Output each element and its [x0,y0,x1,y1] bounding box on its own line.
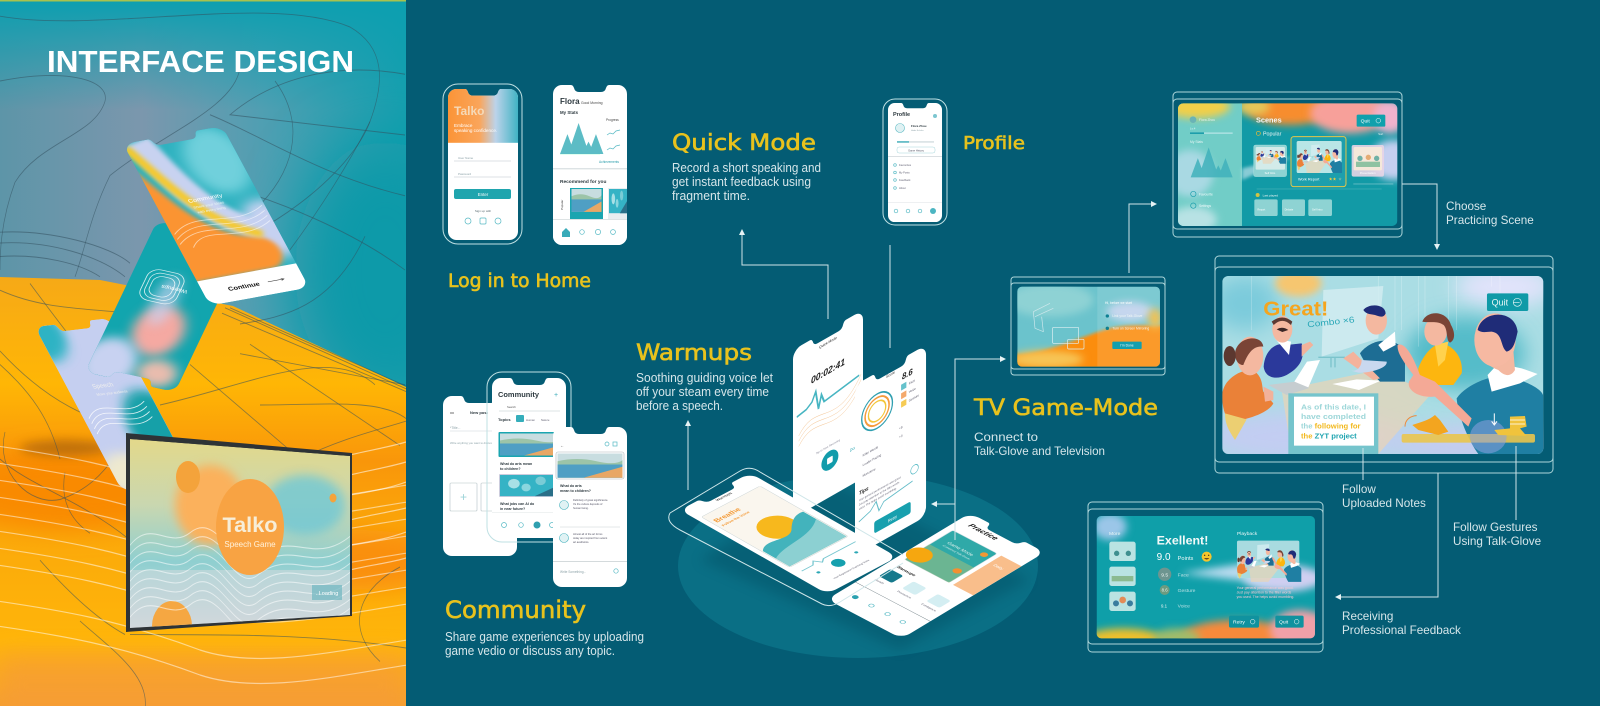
arrow: game to feedback [1339,473,1438,597]
discussion phone: It's the culture deposits of [573,502,603,506]
heading: community: Community [445,596,586,624]
login phone [443,84,522,244]
profile phone: Favourites [899,163,912,167]
quick mode phone: Tap to Start Recording [816,438,841,456]
TV game mode screen: Turn on Screen Mirroring [1112,326,1149,330]
arrow: to warmups [687,424,689,490]
score phone: Tips [859,486,869,497]
profile phone: Feedback [899,178,911,182]
scenes screen: Flora Zhou [1199,118,1215,122]
community phone: in near future? [500,507,525,511]
community phone: Search [507,405,516,409]
feedback screen: Face [1178,572,1189,578]
floor waves [0,442,420,683]
scenes screen: Self Intro [1312,208,1323,212]
warmups phone: Warmups [714,491,734,502]
text: warmups description [636,371,774,413]
score phone: Face [909,378,915,386]
scenes screen: Scenes [1256,116,1282,125]
TV: talko speech game: Speech Game [224,540,276,549]
home phone: Good Morning [581,101,603,105]
feedback screen [1083,502,1330,657]
login phone: speaking confidence. [454,128,497,133]
main game screen [1205,256,1558,473]
label: choose practicing scene: Practicing Scene [1446,214,1534,227]
TV game mode screen [1007,277,1165,375]
label: choose practicing scene [1446,200,1534,227]
community phone: Community [498,390,540,399]
TV game mode screen: Link your Talk-Glove [1112,314,1143,318]
feedback screen: Playback [1237,531,1258,537]
text: quick mode description: Record a short speaking and [672,161,821,175]
discussion phone: human being. [573,506,589,510]
score phone: 8.6 [902,366,913,382]
home phone: My Stats [560,110,579,115]
new post phone: New post [470,410,488,415]
score phone: used. The helps avoid mumbling. [859,486,897,511]
warmups phone: Your Expression Coaching Voice [832,559,871,580]
text: warmups description: before a speech. [636,399,723,413]
score phone: Gesture [909,393,919,403]
main game screen: Great! [1263,297,1328,320]
phone: community screen: Community [187,193,225,205]
feedback screen: Gesture [1178,588,1196,594]
community phone: to children? [500,467,521,471]
practice phone: Practice [966,522,1001,542]
practice phone: Combined Talk-Glove [941,544,972,561]
text: quick mode description: get instant feedback using [672,175,811,189]
login phone: Sign up with [475,209,492,213]
scenes screen [1163,92,1417,237]
phone: community screen: with every thing [197,206,226,214]
new post phone: + [460,490,467,504]
practice phone: Daily [992,563,1006,571]
score phone: Voice [909,386,916,394]
score phone: Retry [888,513,898,524]
label: receiving feedback: Receiving [1342,610,1393,623]
quick mode phone: 00:02:41 [811,357,845,387]
arrowhead: warmups [685,420,691,426]
home phone: Flora [560,97,580,106]
arrowhead: scenes [1151,201,1157,207]
scenes screen: ★ [1338,177,1342,182]
discussion phone [553,427,627,587]
practice phone: Game Mode [945,541,975,557]
scenes screen: ★★ [1329,177,1337,182]
discussion phone: art aesthetics. [573,540,589,544]
arrow: scenes to game [1402,184,1437,245]
scenes screen: Settings [1199,204,1211,208]
TV: talko speech game: Talko [222,514,278,537]
feedback screen: Your general performance was good. [1237,586,1294,590]
main game screen: Quit [1492,297,1509,307]
home phone [553,85,627,245]
arrow: to quick mode [742,233,828,319]
heading: tv game-mode: TV Game-Mode [973,396,1158,421]
phone: speech screen: Speech [91,382,115,391]
scenes screen: Last played [1263,193,1278,197]
left panel: interface design hero [0,0,406,706]
score phone: Monotone [863,467,876,478]
score phone [855,345,926,556]
isometric platform [678,474,1038,658]
home phone: Progress [606,118,619,122]
score phone: Louder Pacing [863,453,881,467]
heading: warmups: Warmups [636,340,752,366]
scenes screen: Debate [1285,208,1294,212]
feedback screen: Exellent! [1157,533,1208,547]
scenes screen: Work Report [1298,177,1320,181]
text: tv game-mode description [974,431,1105,458]
community phone: Topics [498,417,511,422]
label: receiving feedback: Professional Feedback [1342,624,1461,637]
discussion phone: What do arts [560,484,582,488]
quick mode phone: Done [850,443,859,453]
discussion phone: ← [560,443,564,448]
arrowhead: game [1434,244,1440,250]
community phone: Human [526,418,535,422]
arrowhead: quick mode [739,229,745,235]
TV: talko speech game [126,433,352,632]
text: tv game-mode description: Connect to [974,431,1039,444]
scenes screen: Lv.4 [1190,126,1196,130]
scenes screen: Report [1257,208,1266,212]
feedback screen: 9.1 [1161,604,1168,609]
practice phone: Confidence [920,603,938,612]
warmups phone: Breathe [711,506,743,524]
TV game mode screen: I'm Done [1120,344,1134,348]
TV: talko speech game: ..Loading [316,591,338,597]
score phone: Score [886,370,895,379]
score phone: Killer Words [863,445,878,458]
practice phone [832,516,1040,636]
arrow: to tv mode and score [934,359,1001,540]
community phone [487,372,571,542]
score phone: Just pay attention to the filler words [859,480,900,507]
phone: community screen [127,128,306,304]
warmups outline [669,468,903,606]
grid lines [0,13,406,706]
label: follow uploaded notes [1342,483,1426,510]
practice phone: Warmups [895,565,918,577]
score phone: +3 [899,433,903,439]
home phone: Achievements [599,160,619,164]
main game screen: the ZYT project [1301,431,1357,440]
profile phone: Flora Zhou [911,124,927,128]
arrow: to profile [889,245,891,348]
text: warmups description: off your steam every time [636,385,769,399]
heading: profile: Profile [963,134,1025,154]
community phone: Nature [541,418,550,422]
scenes screen: Popular [1263,131,1282,137]
label: receiving feedback [1342,610,1461,637]
label: follow gestures: Using Talk-Glove [1453,535,1541,548]
warmups phone: Follow the Voice [721,511,751,527]
home phone: Popular [560,200,564,210]
phone: community screen: Continue [227,281,262,293]
phone: warmups screen: Warmups [160,283,189,294]
feedback screen: 9.0 [1157,552,1171,563]
profile phone: Haida Scholar [911,130,924,132]
phone: warmups screen [88,223,218,390]
heading: log in to home: Log in to Home [448,271,591,292]
score phone: Your general performance was good. [859,475,901,503]
profile phone [883,99,947,225]
main game screen: Combo ×6 [1307,314,1355,329]
profile phone: Game History [908,148,925,152]
arrow: gestures line [1515,446,1517,520]
home phone: Recommend for you [560,179,606,185]
discussion phone: Almost all of the art forms [573,532,603,536]
scenes screen: Presentation [1360,171,1376,175]
new post phone: Write anything you want to discuss [450,441,494,445]
feedback screen: Quit [1279,619,1289,625]
feedback screen: you used. The helps avoid mumbling. [1237,595,1294,599]
scenes screen: Quit [1361,118,1370,124]
title: INTERFACE DESIGN [47,44,354,79]
quick mode phone: Quick Mode [819,336,837,350]
discussion phone: today are inspired from acient [573,536,607,540]
phone: speech screen: Move your audience [96,389,129,397]
text: quick mode description [672,161,821,203]
new post phone: *Title... [450,426,460,430]
feedback screen: Voice [1178,604,1190,610]
community phone: What do arts mean [500,462,532,466]
phone: speech screen [38,319,173,490]
login phone: User Name [458,156,474,160]
arrowheads: tv mode [931,356,1006,507]
main game screen: the following for [1301,422,1361,431]
login phone: Embrace [454,123,473,128]
text: quick mode description: fragment time. [672,189,750,203]
profile phone: Profile [893,112,910,118]
scenes screen: My Stats [1190,140,1203,144]
feedback screen: 8.6 [1162,588,1168,593]
score phone: +8 [899,425,903,431]
label: follow uploaded notes: Follow [1342,483,1376,496]
feedback screen: Retry [1233,619,1245,625]
quick mode phone [793,310,863,518]
label: follow gestures [1453,521,1541,548]
feedback screen: More [1109,531,1121,537]
scenes screen: Sort [1378,132,1383,136]
login phone: Password [458,172,472,176]
new post phone [443,396,517,556]
label: follow uploaded notes: Uploaded Notes [1342,497,1426,510]
feedback screen: Points [1178,556,1194,562]
arrow: tv to scenes [1129,204,1153,273]
phone: community screen: Share your ideas [193,201,225,210]
text: tv game-mode description: Talk-Glove and Television [974,445,1105,458]
text: community description: Share game experiences by uploading [445,630,644,644]
profile phone: About [899,186,906,190]
login phone: Enter [478,192,489,197]
login phone: Talko [454,104,484,118]
TV game mode screen: Hi, before we start [1105,301,1132,305]
text: community description [445,630,644,658]
label: follow gestures: Follow Gestures [1453,521,1538,534]
discussion phone: Write Something... [560,570,586,574]
practice phone: Breath [874,578,885,585]
main game screen: have completed [1301,412,1366,421]
main game screen: As of this date, I [1301,402,1366,411]
scenes screen: Self Intro [1265,171,1276,175]
soft shadow under phones [700,480,1030,650]
text: community description: game vedio or discuss any topic. [445,644,615,658]
discussion phone: Definitely of great significance. [573,498,608,502]
practice phone: Pronounce [896,590,913,599]
community phone: + [554,392,558,399]
profile phone: My Posts [899,170,910,174]
heading: quick mode: Quick Mode [672,131,816,156]
scenes screen: Favourite [1199,192,1213,196]
feedback screen: 9.5 [1161,572,1168,578]
discussion phone: mean to children? [560,489,591,493]
label: choose practicing scene: Choose [1446,200,1486,213]
arrow: notes line [1362,448,1364,480]
text: warmups description: Soothing guiding voice let [636,371,774,385]
warmups phone [680,473,897,594]
arrowhead: feedback [1335,594,1341,600]
community phone: What jobs can AI do [500,502,535,506]
feedback screen: Just pay attention to the filler words [1237,590,1292,594]
